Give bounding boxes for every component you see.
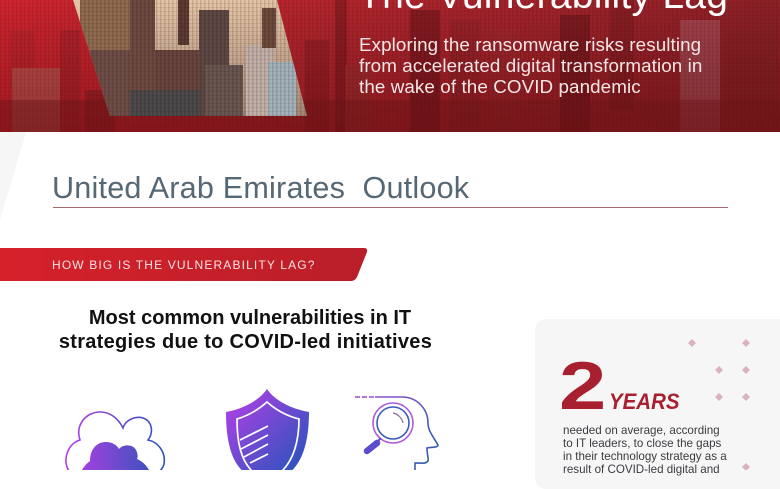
stat panel [535,319,780,489]
section heading: United Arab Emirates Outlook [52,171,469,205]
chart heading: strategies due to COVID-led initiatives [59,331,432,353]
section ribbon [0,248,368,281]
years label: YEARS [609,388,679,414]
icons row [65,389,439,470]
decorative dot grid [688,339,750,470]
decorative pale slash [0,132,26,218]
banner subtitle: from accelerated digital transformation in [359,55,702,76]
icon: head with magnifier [355,397,438,472]
red skyline texture [10,0,780,132]
banner subtitle: Exploring the ransomware risks resulting [359,34,701,55]
heading rule [53,207,728,208]
chart heading [59,307,432,353]
banner subtitle [359,34,702,97]
banner subtitle: the wake of the COVID pandemic [359,76,641,97]
stat description: needed on average, according [563,424,720,437]
stat description [563,424,727,476]
city photo [70,0,310,116]
ribbon label: HOW BIG IS THE VULNERABILITY LAG? [52,258,316,272]
stat description: in their technology strategy as a [563,450,727,463]
stat description: to IT leaders, to close the gaps [563,437,721,450]
big number: 2 [559,348,606,424]
stat description: result of COVID-led digital and [563,463,720,476]
icon: shield [226,389,309,475]
header banner [0,0,780,132]
chart heading: Most common vulnerabilities in IT [89,307,411,329]
icon: cloud [66,412,164,475]
